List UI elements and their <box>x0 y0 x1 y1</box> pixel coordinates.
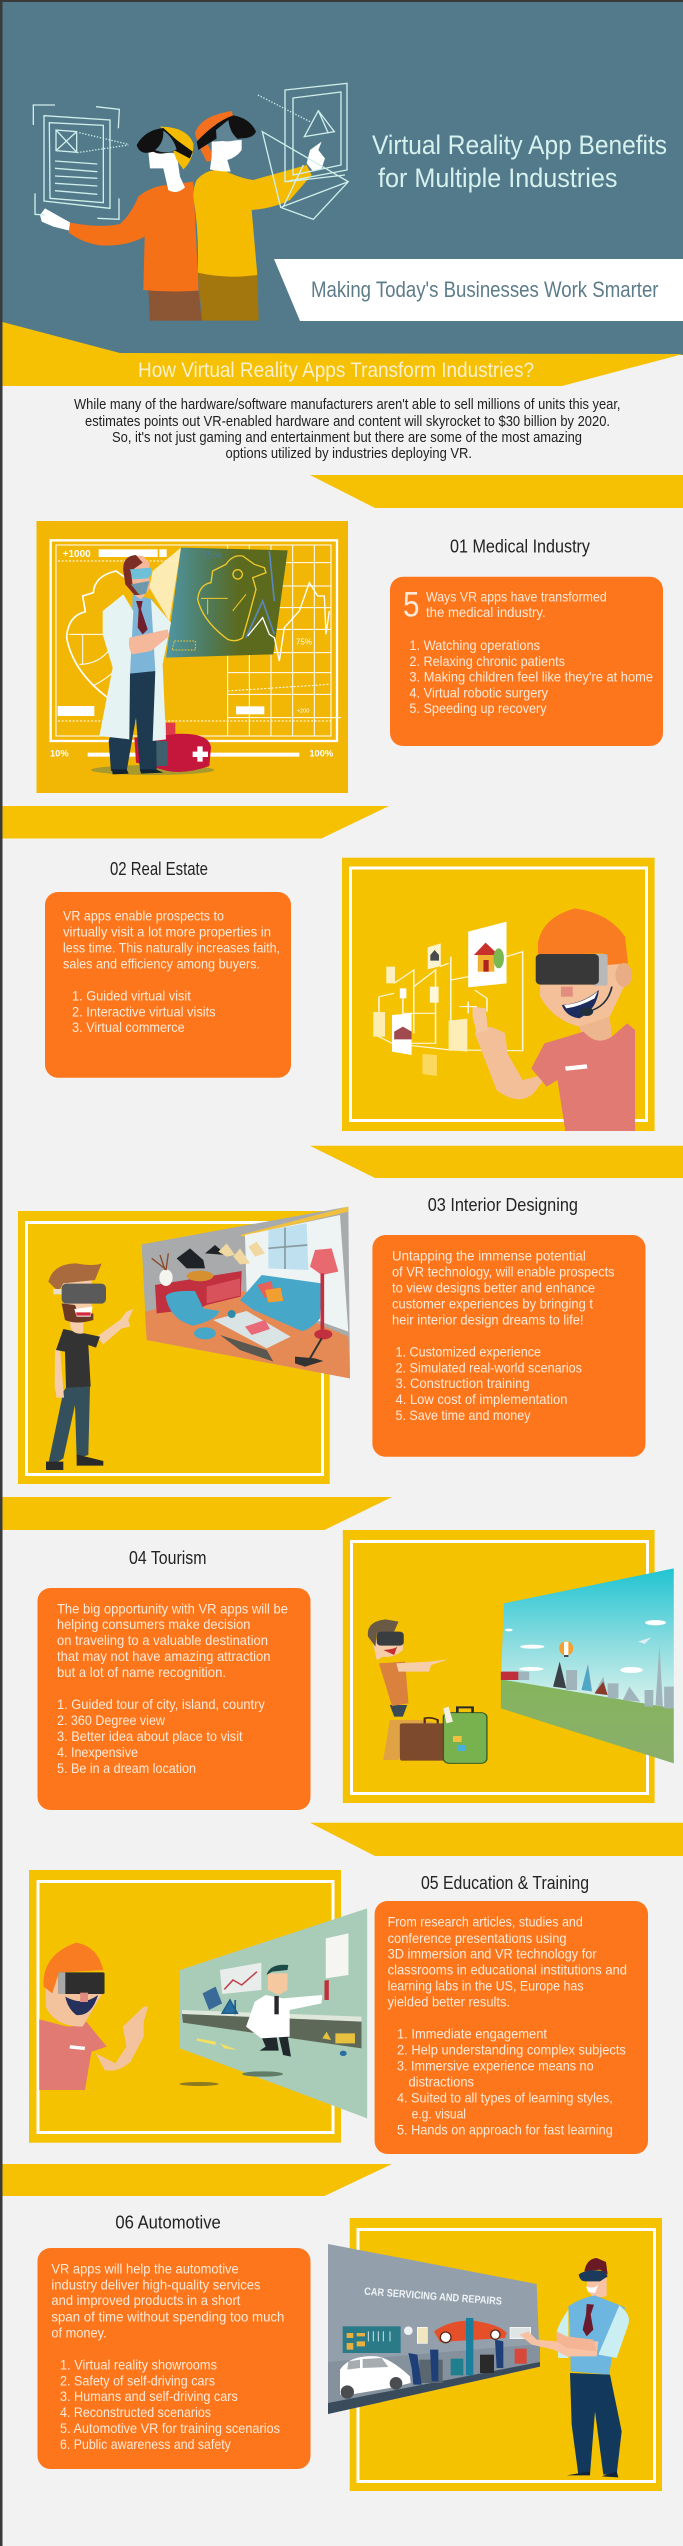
panel: education text: 2. Help understanding complex subjects <box>397 2042 626 2058</box>
panel: interior designing text: of VR technology, will enable prospects <box>392 1264 615 1280</box>
panel: tourism text: 1. Guided tour of city, island, country <box>57 1696 265 1712</box>
panel: interior designing text: 4. Low cost of implementation <box>396 1391 568 1407</box>
panel: tourism text <box>38 1588 310 1810</box>
yellow heading band: How Virtual Reality Apps Transform Industries? <box>138 359 534 382</box>
panel: tourism text: helping consumers make decision <box>57 1616 250 1632</box>
panel: automotive text: VR apps will help the automotive <box>51 2260 239 2276</box>
panel: interior designing text: 5. Save time and money <box>396 1407 530 1423</box>
panel: medical text: 5 <box>403 586 420 625</box>
panel: automotive text: 6. Public awareness and safety <box>60 2436 231 2452</box>
panel: medical text: 2. Relaxing chronic patients <box>409 653 565 669</box>
panel: automotive text: 3. Humans and self-driving cars <box>60 2388 238 2404</box>
panel: interior designing text: customer experiences by bringing t <box>392 1296 593 1312</box>
panel: real estate text <box>45 892 291 1078</box>
panel: medical text: the medical industry. <box>426 604 546 620</box>
illustration: boy with VR headset touching property cards <box>373 908 635 1131</box>
panel: interior designing image <box>18 1207 350 1484</box>
panel: real estate text: VR apps enable prospects to <box>63 908 224 924</box>
panel: real estate text: 3. Virtual commerce <box>72 1019 185 1035</box>
panel: automotive text: industry deliver high-quality services <box>51 2276 261 2292</box>
panel: tourism text: The big opportunity with VR apps will be <box>57 1600 288 1616</box>
panel: real estate text: less time. This naturally increases faith, <box>63 940 280 956</box>
intro paragraph <box>74 396 620 462</box>
panel: real estate image <box>342 858 655 1131</box>
panel: medical text: Ways VR apps have transformed <box>426 589 607 605</box>
panel: real estate text: 2. Interactive virtual visits <box>72 1004 216 1020</box>
panel: tourism text: 4. Inexpensive <box>57 1744 138 1760</box>
panel: interior designing text: 3. Construction training <box>396 1375 530 1391</box>
panel: automotive text: of money. <box>51 2324 107 2340</box>
header background <box>2 2 683 355</box>
panel: education text: yielded better results. <box>388 1994 510 2010</box>
panel: education text: classrooms in educational institutions and <box>388 1962 627 1978</box>
panel: education text: 3D immersion and VR technology for <box>388 1946 597 1962</box>
illustration: doctor with VR headset and heart display: 10% <box>50 748 69 758</box>
heading: 03 interior designing: 03 Interior Designing <box>428 1195 578 1215</box>
panel: tourism text: 2. 360 Degree view <box>57 1712 166 1728</box>
illustration: boy with VR headset pointing at a laboratory <box>39 1908 367 2118</box>
panel: education text: 1. Immediate engagement <box>397 2026 547 2042</box>
panel: automotive image <box>328 2218 662 2491</box>
panel: medical text: 5. Speeding up recovery <box>409 700 547 716</box>
panel: real estate text: sales and efficiency among buyers. <box>63 956 260 972</box>
hero illustration: two people wearing VR headsets <box>33 83 348 321</box>
band <box>310 1146 683 1178</box>
intro paragraph: estimates points out VR-enabled hardware and content will skyrocket to $30 billion by 2020. <box>85 413 610 430</box>
panel: medical image <box>36 521 348 793</box>
band <box>2 1497 392 1530</box>
intro paragraph: So, it's not just gaming and entertainment but there are some of the most amazing <box>112 429 582 446</box>
panel: automotive text <box>38 2248 310 2469</box>
heading: 06 automotive: 06 Automotive <box>115 2213 221 2233</box>
panel: tourism text: 5. Be in a dream location <box>57 1760 196 1776</box>
heading: 05 education and training: 05 Education & Training <box>421 1873 589 1893</box>
panel: interior designing text: heir interior design dreams to life! <box>392 1312 584 1328</box>
panel: medical text: 3. Making children feel like they're at home <box>409 669 653 685</box>
panel: education text: distractions <box>408 2074 474 2090</box>
illustration: doctor with VR headset and heart display: 75% <box>202 551 222 562</box>
title: for Multiple Industries <box>378 163 618 193</box>
band <box>2 2164 392 2196</box>
white subtitle banner <box>274 259 683 321</box>
panel: education text: conference presentations using <box>388 1930 567 1946</box>
panel: education image <box>29 1870 367 2143</box>
heading: 04 tourism: 04 Tourism <box>129 1548 206 1568</box>
illustration: doctor with VR headset and heart display <box>50 540 341 775</box>
intro paragraph: options utilized by industries deploying VR. <box>226 445 472 462</box>
panel: tourism text: that may not have amazing attraction <box>57 1648 270 1664</box>
panel: automotive text: 4. Reconstructed scenarios <box>60 2404 211 2420</box>
panel: tourism image <box>343 1530 674 1803</box>
illustration: doctor with VR headset and heart display: +200 <box>297 708 309 714</box>
panel: real estate text: 1. Guided virtual visit <box>72 988 191 1004</box>
panel: automotive text: 2. Safety of self-driving cars <box>60 2372 215 2388</box>
panel: tourism text: on traveling to a valuable destination <box>57 1632 268 1648</box>
heading: 02 real estate: 02 Real Estate <box>110 859 208 879</box>
band <box>310 475 683 508</box>
band <box>2 806 389 838</box>
panel: interior designing text: Untapping the immense potential <box>392 1248 586 1264</box>
illustration: doctor with VR headset and heart display: +1000 <box>63 549 91 560</box>
panel: automotive text: 5. Automotive VR for training scenarios <box>60 2420 280 2436</box>
band <box>310 1823 683 1856</box>
illustration: tourist with VR headset and suitcases <box>368 1568 674 1763</box>
panel: education text: 3. Immersive experience means no <box>397 2058 594 2074</box>
panel: automotive text: 1. Virtual reality showrooms <box>60 2356 217 2372</box>
illustration: man with VR headset and car repair workshop: CAR SERVICING AND REPAIRS <box>364 2286 502 2308</box>
illustration: man with VR headset pointing at a living room <box>46 1207 350 1470</box>
panel: interior designing text: 2. Simulated real-world scenarios <box>396 1360 582 1376</box>
panel: interior designing text <box>372 1235 646 1457</box>
panel: interior designing text: 1. Customized experience <box>396 1343 541 1359</box>
yellow heading band <box>2 322 683 386</box>
panel: education text: From research articles, studies and <box>388 1914 583 1930</box>
panel: education text: learning labs in the US, Europe has <box>388 1978 584 1994</box>
panel: automotive text: and improved products in a short <box>51 2292 241 2308</box>
panel: real estate text: virtually visit a lot more properties in <box>63 924 271 940</box>
title <box>372 130 667 193</box>
panel: education text: 4. Suited to all types of learning styles, <box>397 2090 613 2106</box>
panel: automotive text: span of time without spending too much <box>51 2308 284 2324</box>
panel: education text: 5. Hands on approach for fast learning <box>397 2122 613 2138</box>
icon: house <box>394 943 504 1039</box>
panel: education text <box>375 1901 648 2154</box>
heading: 01 medical industry: 01 Medical Industry <box>450 537 590 557</box>
illustration: doctor with VR headset and heart display: 100% <box>309 748 334 758</box>
panel: interior designing text: to view designs better and enhance <box>392 1280 595 1296</box>
panel: education text: e.g. visual <box>412 2106 466 2122</box>
panel: medical text: 4. Virtual robotic surgery <box>409 685 548 701</box>
panel: medical text <box>390 577 663 746</box>
panel: tourism text: 3. Better idea about place to visit <box>57 1728 243 1744</box>
panel: tourism text: but a lot of name recognition. <box>57 1664 226 1680</box>
panel: medical text: 1. Watching operations <box>409 637 540 653</box>
illustration: doctor with VR headset and heart display: 75% <box>296 637 312 646</box>
illustration: man with VR headset and car repair workshop <box>328 2244 629 2477</box>
